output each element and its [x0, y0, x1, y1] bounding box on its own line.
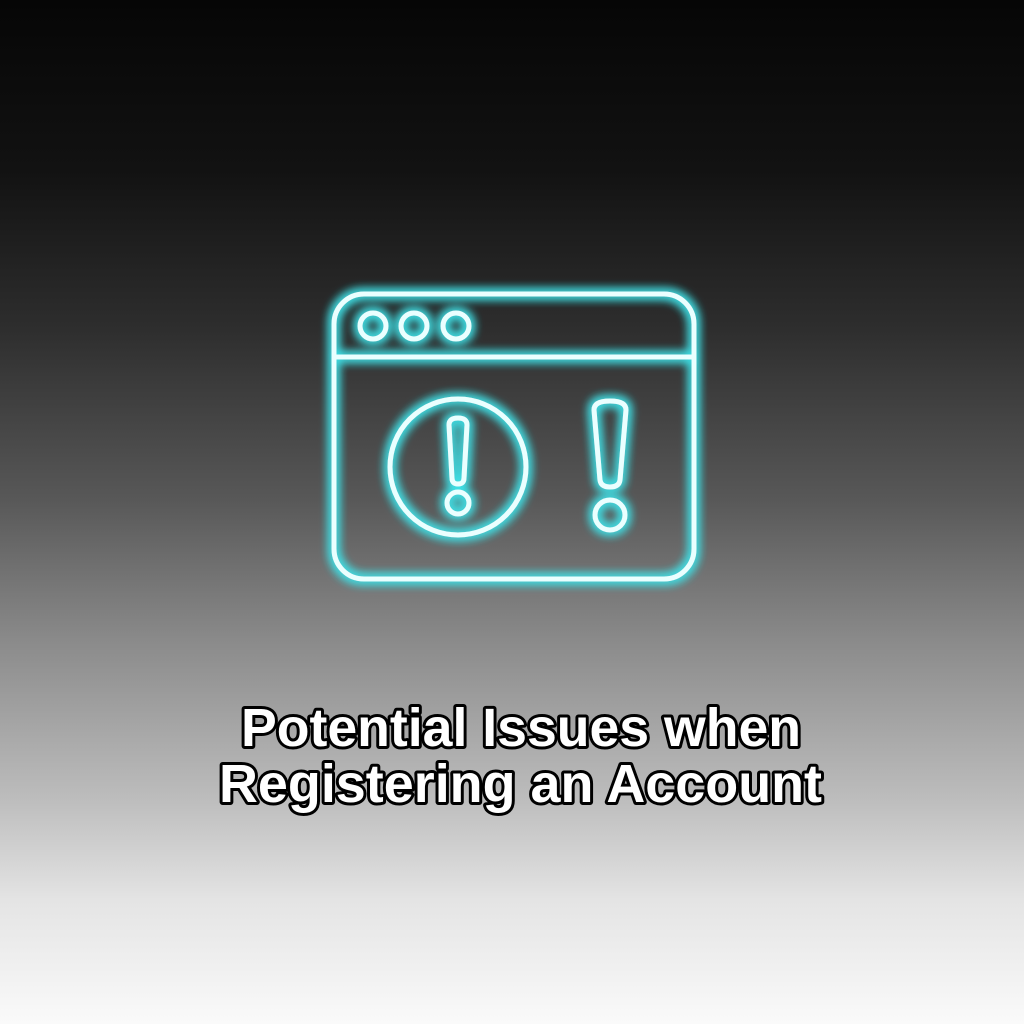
window dots [360, 313, 469, 339]
icon: circled exclamation [390, 399, 526, 535]
icon: exclamation mark [594, 401, 626, 530]
header divider [336, 354, 692, 360]
title: Potential Issues when [241, 698, 801, 758]
title [219, 698, 822, 814]
icon: browser window with warnings [334, 294, 694, 579]
title: Registering an Account [219, 754, 822, 814]
browser frame [334, 294, 694, 579]
